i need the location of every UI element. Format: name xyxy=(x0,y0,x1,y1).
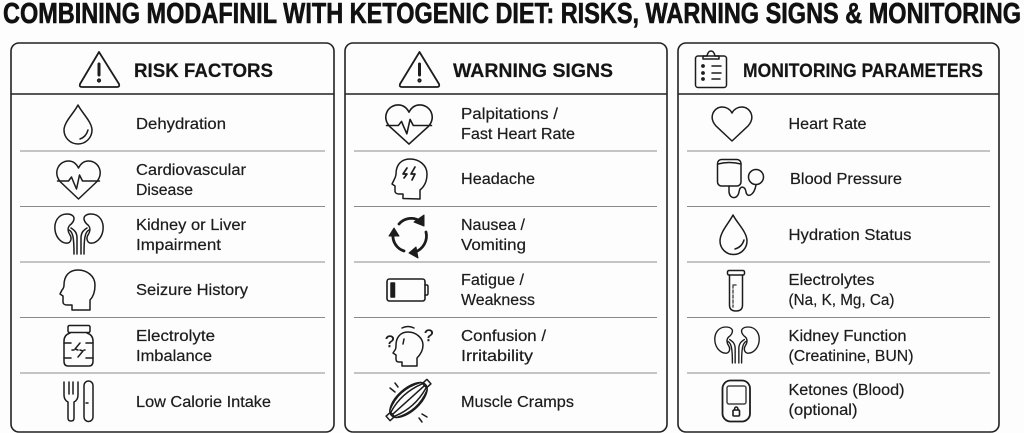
icon: warning triangle xyxy=(80,52,119,87)
label: ketones: (optional) xyxy=(788,402,858,419)
icon: head profile xyxy=(60,270,95,310)
heading: risk factors: RISK FACTORS xyxy=(134,60,273,82)
label: kidney or liver impairment xyxy=(136,217,246,254)
icon: water drop xyxy=(64,105,92,144)
icon: kidneys xyxy=(715,327,759,363)
label: dehydration: Dehydration xyxy=(136,116,226,133)
label: electrolyte imbalance: Electrolyte xyxy=(136,328,215,345)
label: kidney function: (Creatinine, BUN) xyxy=(788,348,914,365)
label: cardiovascular disease xyxy=(136,162,246,199)
label: fatigue or weakness: Fatigue / xyxy=(461,272,525,289)
panel: monitoring parameters xyxy=(678,43,999,432)
heading: warning signs: WARNING SIGNS xyxy=(453,60,613,82)
icon: low battery xyxy=(387,279,428,301)
label: electrolytes: (Na, K, Mg, Ca) xyxy=(788,292,894,309)
label: nausea or vomiting xyxy=(461,217,526,254)
icon: head with headache bolts xyxy=(392,159,427,199)
label: confusion or irritability: Irritability xyxy=(461,348,533,365)
label: confusion or irritability xyxy=(461,328,547,365)
label: kidney function xyxy=(788,328,914,365)
label: ketones xyxy=(788,382,904,419)
label: palpitations: Palpitations / xyxy=(461,106,559,123)
icon: fork and knife xyxy=(64,381,93,422)
label: headache: Headache xyxy=(461,171,535,188)
label: nausea or vomiting: Nausea / xyxy=(461,217,526,234)
label: kidney function: Kidney Function xyxy=(788,328,906,345)
panel: risk factors xyxy=(11,43,334,432)
label: low calorie intake: Low Calorie Intake xyxy=(136,394,271,411)
icon: water drop xyxy=(720,215,747,254)
label: cardiovascular disease: Cardiovascular xyxy=(136,162,246,179)
icon: heart with pulse xyxy=(57,161,100,199)
label: fatigue or weakness xyxy=(461,272,535,309)
label: hydration status: Hydration Status xyxy=(788,227,912,244)
icon: heart with pulse xyxy=(386,105,432,144)
label: blood pressure: Blood Pressure xyxy=(790,171,902,188)
label: muscle cramps: Muscle Cramps xyxy=(461,394,574,411)
icon: confused head: ? xyxy=(385,332,394,351)
panel: warning signs xyxy=(345,43,667,432)
heading: monitoring parameters: MONITORING PARAMETERS xyxy=(743,60,983,82)
label: kidney or liver impairment: Impairment xyxy=(136,237,222,254)
icon: heart xyxy=(712,107,752,141)
label: palpitations xyxy=(461,106,575,143)
label: fatigue or weakness: Weakness xyxy=(461,292,535,309)
label: kidney or liver impairment: Kidney or Liver xyxy=(136,217,246,234)
label: seizure history: Seizure History xyxy=(136,282,248,299)
label: electrolytes: Electrolytes xyxy=(788,272,875,289)
icon: confused head: ? xyxy=(424,326,433,345)
icon: clipboard checklist xyxy=(696,51,726,88)
icon: blood pressure cuff xyxy=(718,160,764,198)
label: confusion or irritability: Confusion / xyxy=(461,328,547,345)
label: ketones: Ketones (Blood) xyxy=(788,382,904,399)
icon: ketone meter xyxy=(722,380,750,422)
icon: warning triangle xyxy=(400,52,439,87)
label: electrolyte imbalance xyxy=(136,328,215,365)
label: electrolytes xyxy=(788,272,894,309)
icon: kidneys xyxy=(55,214,103,254)
icon: test tube xyxy=(728,270,744,311)
icon: circular arrows xyxy=(389,215,426,258)
label: nausea or vomiting: Vomiting xyxy=(461,237,526,254)
icon: confused head xyxy=(385,326,433,366)
icon: muscle xyxy=(381,373,436,427)
label: electrolyte imbalance: Imbalance xyxy=(136,348,212,365)
label: heart rate: Heart Rate xyxy=(788,116,866,133)
icon: supplement jar xyxy=(64,326,93,366)
label: palpitations: Fast Heart Rate xyxy=(461,126,575,143)
label: cardiovascular disease: Disease xyxy=(136,182,193,199)
